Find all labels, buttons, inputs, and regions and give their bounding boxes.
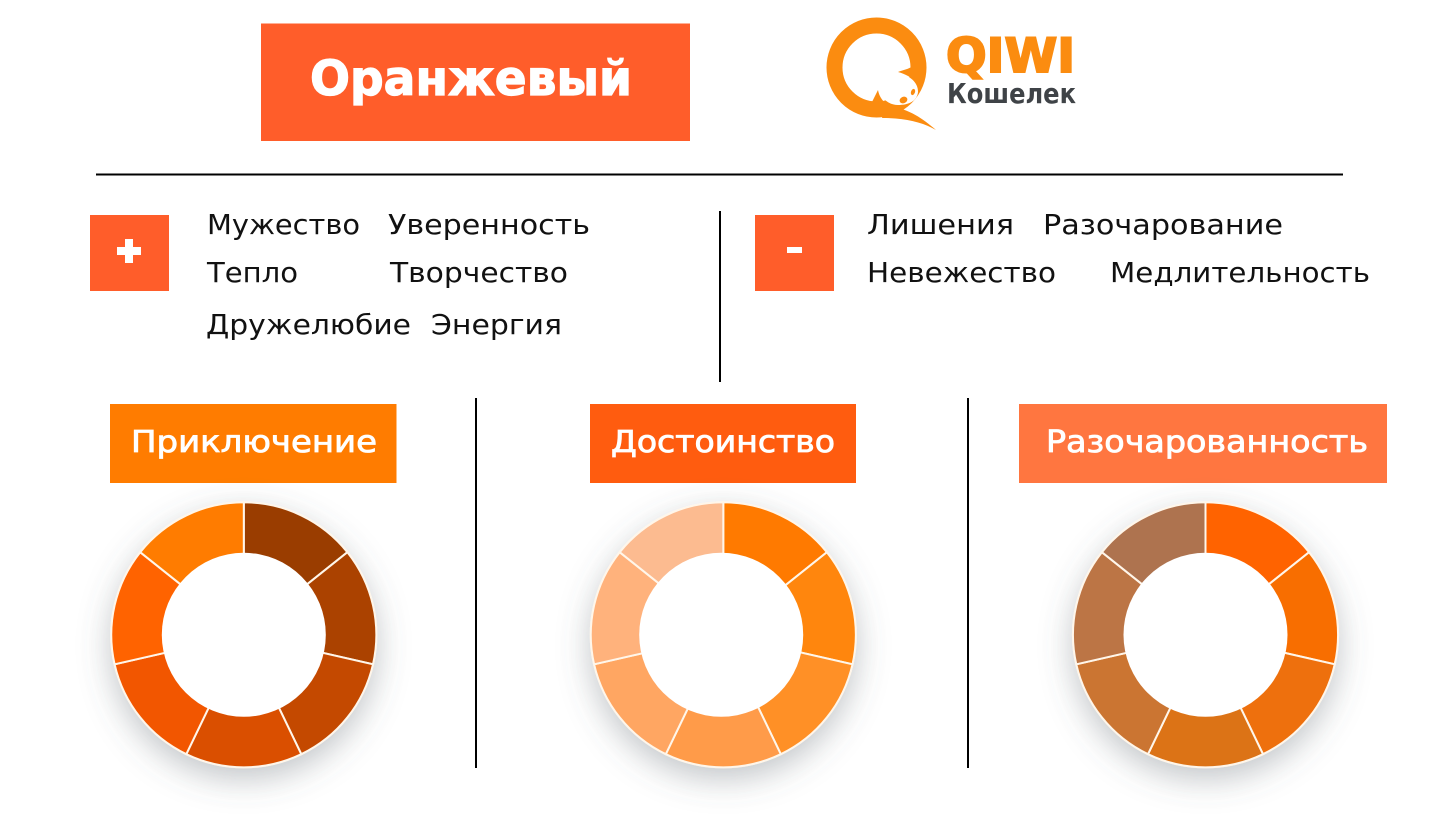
heading: Достоинство	[590, 404, 856, 483]
positive word list: Мужество	[207, 208, 360, 241]
panel: Приключение	[110, 404, 396, 767]
icon: QIWI Q mark	[834, 26, 936, 130]
title banner	[261, 24, 690, 141]
positive word list: Тепло	[206, 256, 298, 289]
icon: plus badge	[90, 215, 169, 291]
positive word list: Энергия	[431, 308, 562, 341]
donut chart: Приключение	[111, 502, 376, 767]
heading: Разочарованность: Разочарованность	[1046, 425, 1368, 460]
panel: Разочарованность	[1019, 404, 1387, 767]
logo: QIWI Кошелек	[834, 26, 1076, 130]
logo wordmark Кошелек: Кошелек	[947, 77, 1076, 110]
icon: minus badge	[755, 215, 834, 291]
logo wordmark QIWI: QIWI	[946, 29, 1075, 84]
donut chart: Достоинство	[591, 502, 856, 767]
panel: negative traits	[755, 208, 1370, 291]
negative word list: Лишения	[867, 208, 1014, 241]
positive word list: Дружелюбие	[206, 308, 411, 341]
negative word list	[867, 208, 1370, 289]
positive word list	[206, 208, 590, 341]
heading: Разочарованность	[1019, 404, 1387, 483]
negative word list: Невежество	[867, 256, 1056, 289]
title banner: Оранжевый	[310, 51, 632, 107]
panel: Достоинство	[590, 404, 856, 767]
donut chart: Разочарованность	[1073, 502, 1338, 767]
negative word list: Медлительность	[1110, 256, 1370, 289]
heading: Достоинство: Достоинство	[611, 425, 835, 460]
positive word list: Уверенность	[388, 208, 590, 241]
panel: positive traits	[90, 208, 590, 341]
negative word list: Разочарование	[1043, 208, 1283, 241]
positive word list: Творчество	[389, 256, 568, 289]
heading: Приключение: Приключение	[131, 425, 377, 460]
heading: Приключение	[110, 404, 396, 483]
